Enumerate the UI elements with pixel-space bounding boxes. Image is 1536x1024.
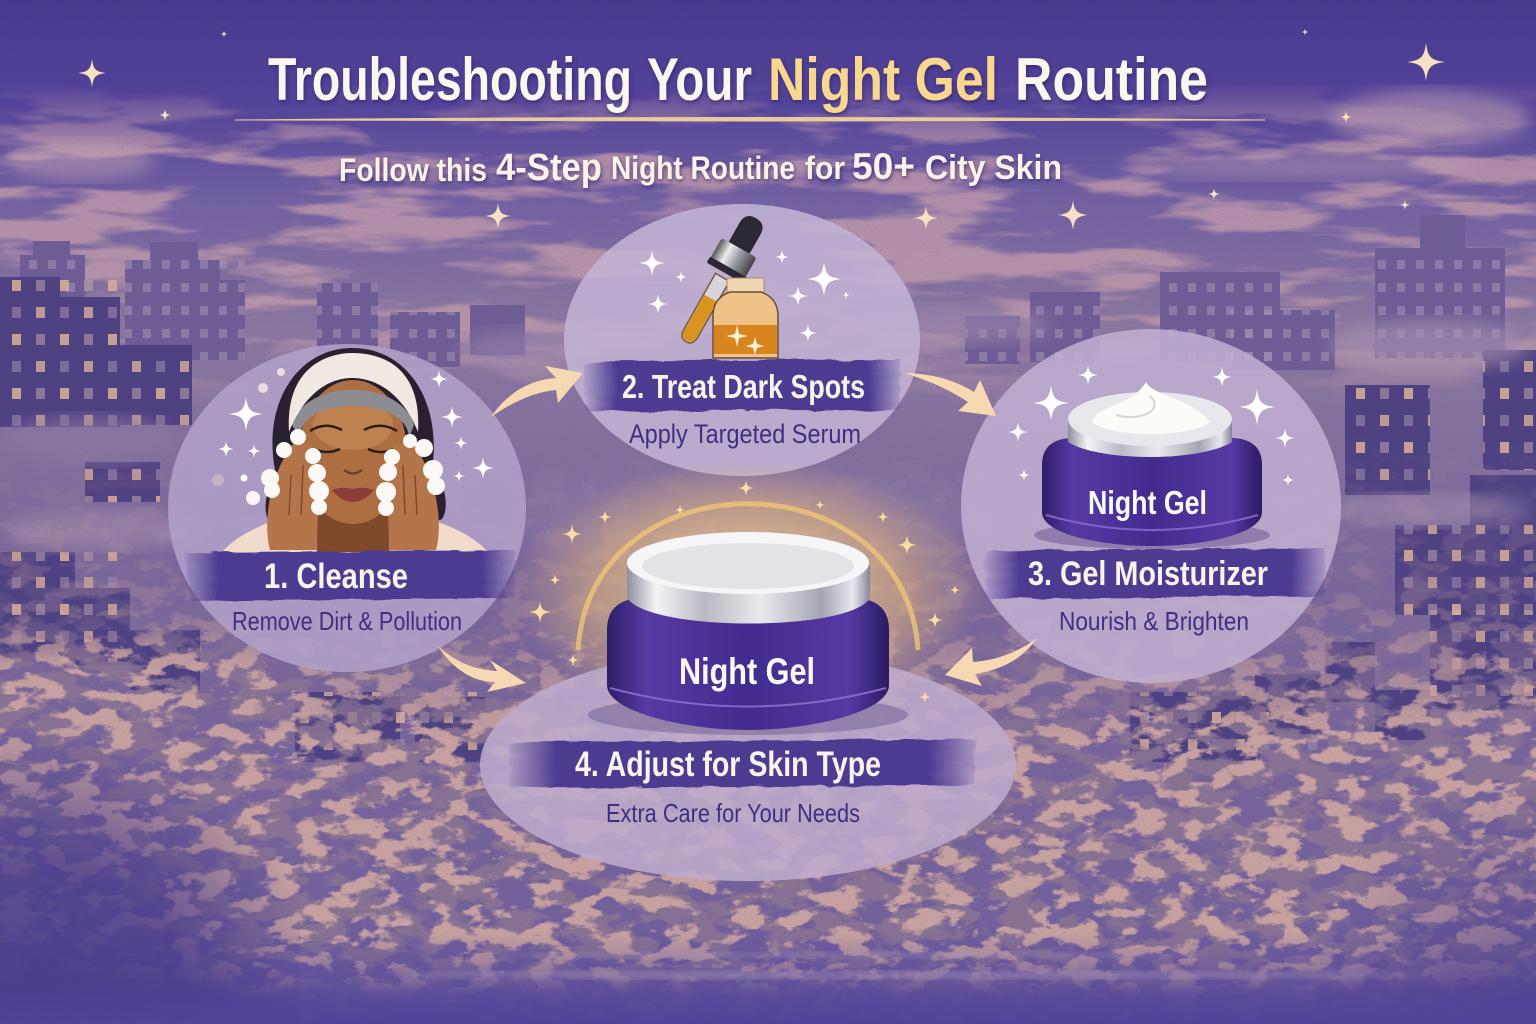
banner: step 2	[585, 359, 900, 412]
blossom tree clouds	[0, 465, 1536, 1012]
jar label: Night Gel	[679, 651, 815, 692]
subtitle: for	[805, 150, 845, 186]
sparkles: serum	[639, 250, 850, 342]
icon: large night gel jar	[588, 532, 908, 735]
arrow: step 1 to step 2	[491, 366, 583, 417]
icon: serum dropper and bottle	[668, 208, 778, 358]
icon: open night gel jar	[1034, 382, 1270, 549]
decorative sky stars	[78, 28, 1445, 230]
title: Routine	[1015, 46, 1208, 113]
caption: step 1: Remove Dirt & Pollution	[232, 606, 462, 636]
panel: step 3 gel moisturizer	[961, 329, 1341, 683]
title	[268, 46, 1208, 113]
caption: step 2: Apply Targeted Serum	[629, 419, 861, 449]
caption: step 4: Extra Care for Your Needs	[606, 798, 860, 828]
panel: step 2 treat dark spots	[564, 204, 920, 476]
sparkles: moisturizer	[1008, 365, 1295, 486]
subtitle: Night Routine	[611, 150, 795, 186]
icon: woman cleansing face	[222, 348, 488, 552]
panel: step 4 adjust for skin type	[480, 460, 1016, 881]
golden sparkles	[529, 480, 960, 703]
title underline	[235, 118, 1265, 121]
golden arch glow	[578, 504, 918, 650]
panel: step 1 cleanse	[168, 344, 526, 672]
banner: step 1	[185, 550, 515, 601]
sparkles: cleanse	[212, 368, 494, 486]
subtitle: City Skin	[925, 149, 1062, 187]
arrow: step 2 to step 3	[904, 373, 996, 416]
banner: step 3: 3. Gel Moisturizer	[1028, 555, 1268, 593]
city skyline, far layer	[20, 215, 1505, 370]
title: Troubleshooting	[268, 46, 632, 113]
subtitle: 4-Step	[496, 147, 602, 189]
city skyline, near layer	[0, 277, 1536, 762]
arrow: step 1 to step 4	[438, 646, 526, 692]
title: Your	[647, 46, 752, 113]
subtitle: Follow this	[339, 152, 487, 188]
banner: step 2: 2. Treat Dark Spots	[622, 368, 865, 405]
banner: step 3	[985, 548, 1325, 599]
title: Night Gel	[768, 46, 998, 113]
jar label: Night Gel	[1088, 484, 1207, 521]
icon: foam bubbles	[246, 429, 445, 516]
subtitle	[339, 146, 1062, 189]
subtitle: 50+	[852, 146, 915, 187]
banner: step 1: 1. Cleanse	[264, 557, 408, 596]
banner: step 4	[510, 739, 975, 788]
banner: step 4: 4. Adjust for Skin Type	[575, 745, 881, 784]
mid-level mist	[5, 305, 1530, 570]
sky clouds	[0, 84, 1536, 394]
caption: step 3: Nourish & Brighten	[1059, 606, 1249, 636]
arrow: step 3 to step 4	[945, 638, 1037, 686]
